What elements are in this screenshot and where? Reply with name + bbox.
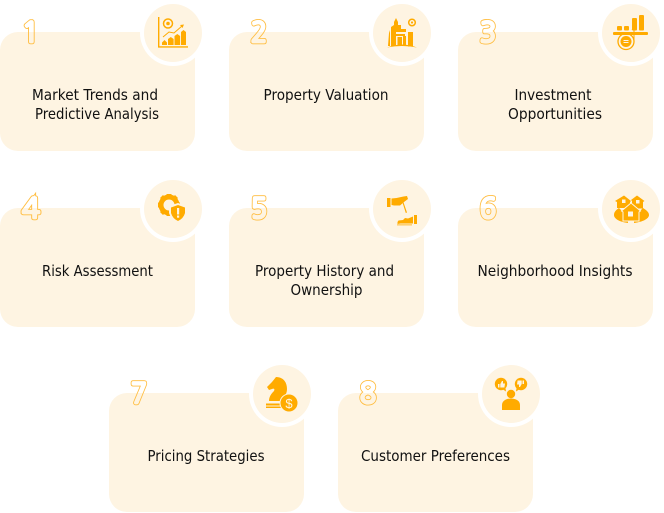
label: Market Trends and <box>32 86 158 104</box>
panel: customer preferences <box>338 361 544 512</box>
icon: key handover between hands <box>387 196 417 225</box>
icon: bars and coin <box>613 15 648 50</box>
number 3: 3 <box>480 19 496 47</box>
number 5: 5 <box>251 195 267 223</box>
label: Predictive Analysis <box>35 105 159 123</box>
number 6: 6 <box>480 195 496 223</box>
icon: chess knight with coin <box>266 377 298 412</box>
icon: neighborhood houses <box>614 196 649 223</box>
icon: person with thumbs up and down <box>495 378 527 410</box>
panel: property valuation <box>229 0 435 151</box>
coin symbol: $ <box>285 396 293 411</box>
label: Opportunities <box>508 105 602 123</box>
number 6: 6 <box>480 195 496 223</box>
number 7: 7 <box>131 380 147 408</box>
label: Pricing Strategies <box>148 447 265 465</box>
panel: investment opportunities <box>458 0 664 151</box>
number 2: 2 <box>251 19 267 47</box>
panel: pricing strategies <box>109 361 315 512</box>
number 1: 1 <box>22 19 39 47</box>
number 4: 4 <box>22 195 40 223</box>
panel: risk assessment <box>0 176 206 327</box>
number 8: 8 <box>360 380 376 408</box>
number 2: 2 <box>251 19 267 47</box>
number 7: 7 <box>131 380 147 408</box>
panel: neighborhood insights <box>458 176 664 327</box>
number 1: 1 <box>22 19 39 47</box>
label: Investment <box>514 86 592 104</box>
label: Property Valuation <box>264 86 388 104</box>
number 5: 5 <box>251 195 267 223</box>
label: Ownership <box>290 281 362 299</box>
panel: market trends <box>0 0 206 151</box>
label: Neighborhood Insights <box>478 262 633 280</box>
label: Customer Preferences <box>361 447 510 465</box>
panel: property history <box>229 176 435 327</box>
icon: gear and warning shield <box>158 194 187 223</box>
icon: rising chart with coin <box>158 17 188 48</box>
number 4: 4 <box>22 195 40 223</box>
label: Risk Assessment <box>42 262 153 280</box>
number 8: 8 <box>360 380 376 408</box>
label: Property History and <box>255 262 394 280</box>
number 3: 3 <box>480 19 496 47</box>
icon: city buildings with coin <box>387 18 417 48</box>
